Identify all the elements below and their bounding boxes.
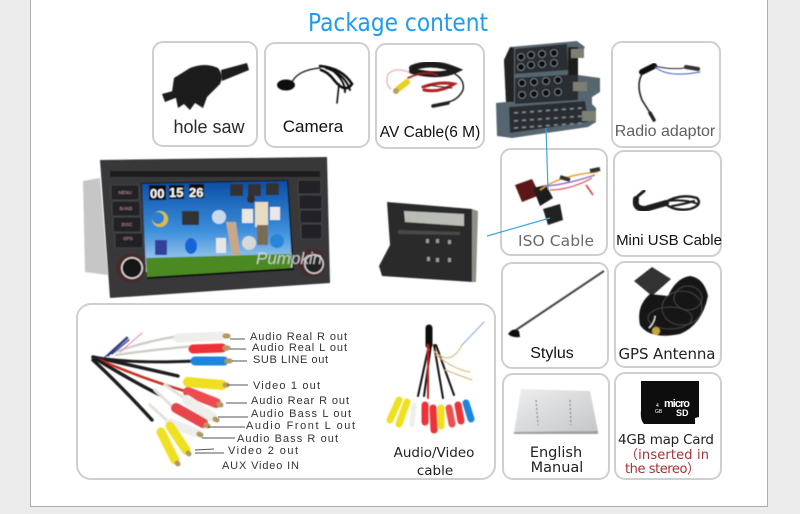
RCA output labels: AUX Video IN — [222, 460, 299, 472]
stereo right buttons — [298, 180, 322, 239]
RCA output labels: Audio Real R out — [250, 331, 347, 343]
icon: micro SD card — [641, 381, 699, 424]
stereo button labels: BAND — [120, 206, 133, 211]
panel: stylus — [502, 263, 608, 368]
icon: micro SD card: SD — [676, 408, 689, 418]
icon: ISO connector block — [496, 41, 600, 138]
icon: radio adaptor — [639, 66, 700, 120]
panel: ISO cable — [501, 149, 607, 255]
panel: hole saw — [153, 42, 257, 146]
screen grass — [146, 254, 293, 277]
RCA output labels: Audio Rear R out — [251, 395, 349, 407]
icon: micro SD card: GB — [655, 409, 663, 415]
panel: camera — [265, 43, 369, 147]
label: audio video cable: cable — [417, 463, 453, 479]
label: mini USB cable: Mini USB Cable — [616, 232, 722, 249]
label leader lines — [195, 339, 248, 453]
icon: AV cable — [387, 64, 463, 106]
stereo button labels: GPS — [123, 236, 133, 241]
label: ISO cable: ISO Cable — [518, 232, 594, 250]
head unit stereo — [83, 157, 330, 298]
screen clock: 26 — [189, 185, 203, 200]
icon: manual booklet — [514, 389, 598, 434]
panel: mini USB cable — [614, 151, 722, 256]
right knob — [298, 249, 326, 277]
RCA output labels: Audio Bass L out — [251, 408, 351, 420]
label: radio adaptor: Radio adaptor — [615, 123, 716, 140]
rear connector of stereo — [379, 202, 478, 282]
screen top icons — [230, 183, 279, 196]
label: AV cable: AV Cable(6 M) — [380, 124, 480, 141]
icon: camera — [277, 66, 352, 103]
icon: mini USB cable — [636, 191, 699, 210]
icon: hole saw — [162, 63, 249, 110]
screen clock: 15 — [169, 185, 183, 200]
note: inserted in the stereo: （inserted in — [625, 448, 709, 463]
RCA output labels: Video 2 out — [228, 445, 298, 457]
panel: audio video harness — [77, 304, 495, 479]
watermark: Pumpkin — [256, 249, 322, 268]
label: hole saw: hole saw — [173, 117, 246, 137]
RCA output labels: Video 1 out — [253, 380, 320, 392]
screen family figures — [226, 195, 268, 255]
icon: micro SD card: 4 — [656, 403, 659, 409]
stereo button labels: MENU — [118, 190, 132, 195]
label: camera: Camera — [283, 117, 344, 136]
arrow: rear connector to ISO cable — [487, 218, 550, 236]
title: Package content — [308, 8, 488, 37]
panel: GPS antenna — [615, 262, 721, 367]
stereo body — [100, 157, 330, 298]
RCA output labels: Audio Front L out — [246, 420, 355, 432]
icon: ISO cable — [515, 169, 600, 225]
icon: micro SD card: micro — [664, 398, 690, 410]
label: audio video cable: Audio/Video — [394, 445, 474, 461]
stereo button labels — [118, 190, 133, 241]
label: map card: 4GB map Card — [618, 432, 714, 448]
stereo screen — [141, 180, 294, 279]
left knob — [116, 253, 146, 283]
arrow: connector to ISO cable — [546, 128, 548, 190]
icon: GPS antenna — [634, 267, 708, 336]
panel: English manual — [503, 374, 609, 479]
stereo button labels: DISC — [122, 222, 133, 227]
panel: radio adaptor — [612, 42, 720, 147]
RCA output labels: Audio Real L out — [252, 342, 347, 354]
label: English manual: English — [530, 445, 582, 461]
RCA output labels: SUB LINE out — [253, 354, 328, 366]
screen clock: 00 — [150, 186, 164, 201]
screen clock — [149, 184, 204, 201]
note: inserted in the stereo: the stereo） — [625, 462, 700, 477]
RCA output labels — [222, 331, 355, 472]
icon: stylus — [508, 271, 604, 337]
panel: AV cable — [376, 44, 484, 148]
label: English manual: Manual — [531, 460, 583, 476]
illustration: full harness — [390, 322, 484, 430]
screen app icons — [152, 207, 284, 255]
chassis side — [83, 178, 108, 275]
stereo left buttons — [111, 185, 143, 248]
illustration: RCA cable fan — [93, 333, 230, 464]
panel: map card — [615, 373, 721, 479]
label: GPS antenna: GPS Antenna — [618, 345, 716, 363]
label: stylus: Stylus — [530, 345, 574, 362]
RCA output labels: Audio Bass R out — [237, 433, 338, 445]
